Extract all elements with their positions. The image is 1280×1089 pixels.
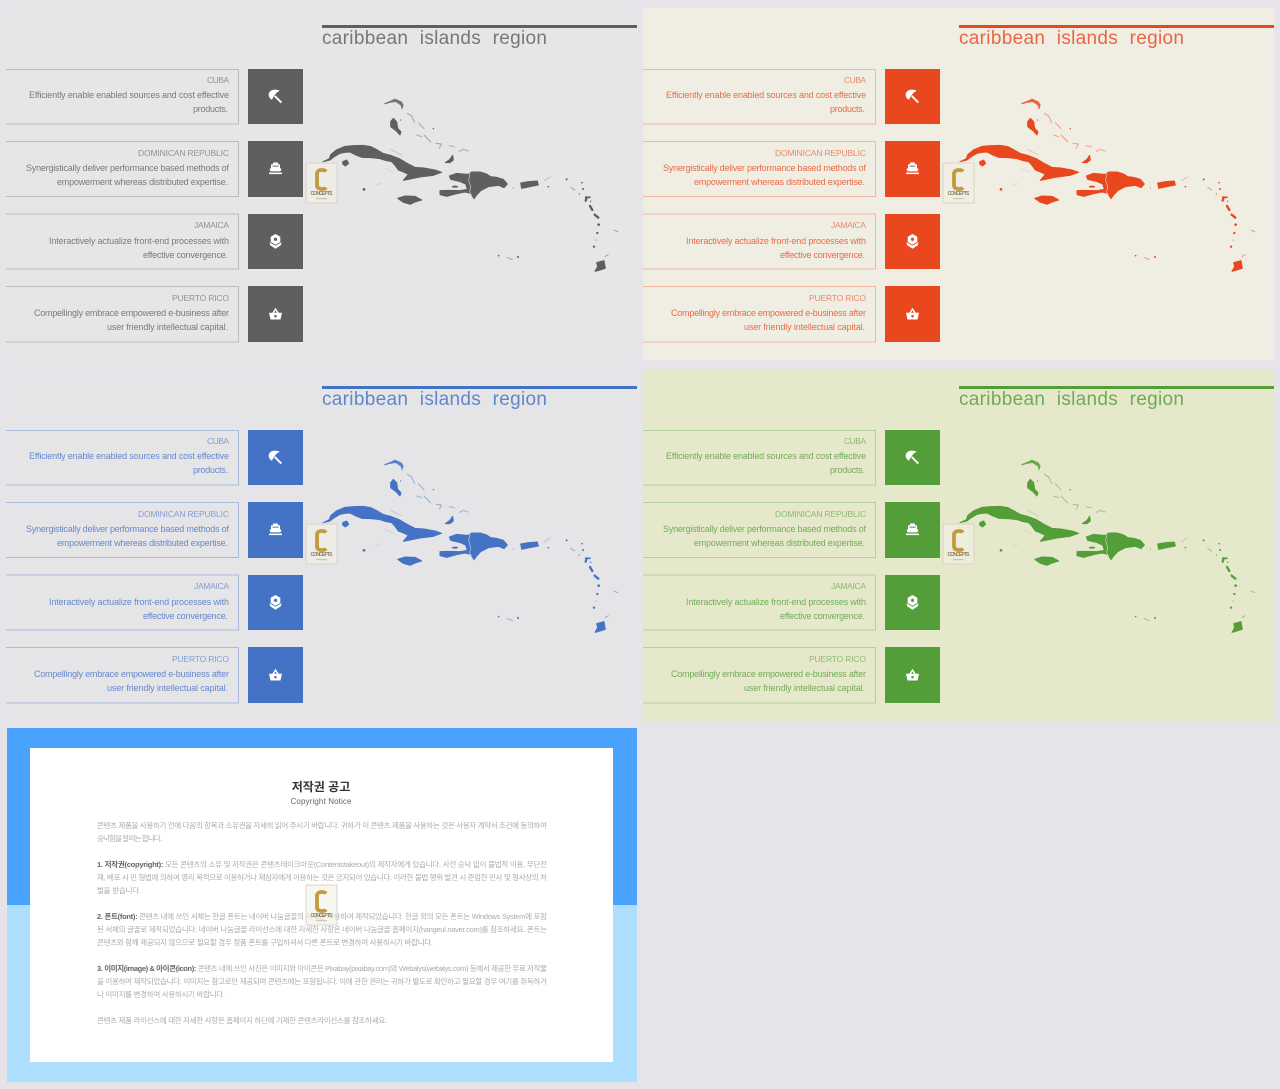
title: orange: caribbean islands region <box>959 28 1184 49</box>
row: Puerto Rico <box>6 647 303 703</box>
row: Puerto Rico: user friendly intellectual capital. <box>744 322 865 332</box>
panel: grey variant <box>6 8 637 360</box>
row: Jamaica <box>643 575 940 630</box>
row: Puerto Rico: PUERTO RICO <box>809 654 866 664</box>
heading: copyright <box>290 779 352 806</box>
text block: clause 3: 3. 이미지(image) & 아이콘(icon): 콘텐츠 내에 쓰인 사진은 이미지와 아이콘은 Pixabay(pixabay.com)와 Webalys(webalys.com) 등에서 제공한 무료 저작물 <box>97 963 547 973</box>
row: Cuba: Efficiently enable enabled sources and cost effective <box>666 451 866 461</box>
text block: clause 2: 2. 폰트(font): 콘텐츠 내에 쓰인 서체는 한글 폰트는 네이버 나눔글꼴의 서체를 사용하여 제작되었습니다. 한글 외의 모든 폰트는 Windows System에 포함 <box>97 911 547 921</box>
row: Jamaica: effective convergence. <box>143 611 228 621</box>
map: orange <box>960 99 1255 271</box>
row: Jamaica: Interactively actualize front-end processes with <box>686 236 866 246</box>
row: Puerto Rico: Compellingly embrace empowered e-business after <box>34 669 229 679</box>
title: grey <box>322 25 637 49</box>
row: Jamaica: JAMAICA <box>831 220 866 230</box>
text block: clause 3 <box>97 963 547 999</box>
row: Dominican Republic <box>643 141 940 197</box>
title: green <box>959 386 1274 410</box>
row: Dominican Republic: empowerment whereas distributed expertise. <box>57 177 228 187</box>
text block: clause 2 <box>97 911 547 947</box>
row: Jamaica: JAMAICA <box>194 220 229 230</box>
row: Dominican Republic <box>643 502 940 558</box>
row: Cuba: Efficiently enable enabled sources and cost effective <box>29 90 229 100</box>
map: blue <box>323 460 618 632</box>
text block: clause 1: 벌을 받습니다. <box>97 885 141 895</box>
text block: clause 3: 나 이미지를 변경하여 사용하시기 바랍니다. <box>97 989 225 999</box>
row: Cuba: Efficiently enable enabled sources and cost effective <box>666 90 866 100</box>
watermark <box>306 524 337 564</box>
row: Cuba: products. <box>193 465 228 475</box>
row: Jamaica: effective convergence. <box>143 250 228 260</box>
title: grey: caribbean islands region <box>322 28 547 49</box>
text block: clause 2: 콘텐츠와 함께 제공되지 않으므로 필요할 경우 정품 폰트를 구입하셔서 다른 폰트로 변경하여 사용하시기 바랍니다. <box>97 937 433 947</box>
row: Jamaica: Interactively actualize front-end processes with <box>49 236 229 246</box>
watermark <box>306 163 337 203</box>
watermark <box>943 163 974 203</box>
row: Cuba <box>6 69 303 124</box>
title: blue <box>322 386 637 410</box>
row: Puerto Rico: user friendly intellectual capital. <box>107 322 228 332</box>
row: Cuba: Efficiently enable enabled sources and cost effective <box>29 451 229 461</box>
heading: copyright: 저작권 공고 <box>292 779 350 794</box>
row: Cuba: products. <box>830 104 865 114</box>
panel: green variant <box>643 369 1274 721</box>
row: Dominican Republic <box>6 141 303 197</box>
row: Jamaica: Interactively actualize front-end processes with <box>49 597 229 607</box>
text block: licence note: 콘텐츠 제품 라이선스에 대한 자세한 사항은 홈페이지 하단에 기재한 콘텐츠라이선스를 참조하세요. <box>97 1015 387 1025</box>
text block: clause 1 <box>97 859 547 895</box>
row: Dominican Republic: empowerment whereas distributed expertise. <box>57 538 228 548</box>
watermark <box>306 885 337 925</box>
row: Dominican Republic: DOMINICAN REPUBLIC <box>138 148 229 158</box>
row: Puerto Rico <box>643 647 940 703</box>
row: Cuba: CUBA <box>207 75 229 85</box>
row: Cuba <box>6 430 303 485</box>
row: Dominican Republic: DOMINICAN REPUBLIC <box>138 509 229 519</box>
row: Puerto Rico <box>643 286 940 342</box>
row: Jamaica <box>6 575 303 630</box>
row: Puerto Rico: Compellingly embrace empowered e-business after <box>671 669 866 679</box>
row: Cuba: CUBA <box>844 75 866 85</box>
text block: intro: 콘텐츠 제품을 사용하기 전에 다음의 항목과 소유권을 자세히 읽어 주시기 바랍니다. 귀하가 이 콘텐츠 제품을 사용하는 것은 사용자 계약서 조건에 동의하여 <box>97 820 547 830</box>
row: Jamaica: JAMAICA <box>831 581 866 591</box>
row: Dominican Republic: empowerment whereas distributed expertise. <box>694 538 865 548</box>
text block: intro: 승낙함을 알리는 합니다. <box>97 833 162 843</box>
row: Puerto Rico: PUERTO RICO <box>172 293 229 303</box>
text block: clause 1: 재, 배포 시 민 형법에 의하여 영리 목적으로 이용하거나 제삼자에게 이용하는 것은 금지되어 있습니다. 이러한 불법 행위 발견 시 준엄한 민사 및 형사상의 처 <box>97 872 547 882</box>
row: Puerto Rico: user friendly intellectual capital. <box>107 683 228 693</box>
map: grey <box>323 99 618 271</box>
row: Puerto Rico <box>6 286 303 342</box>
row: Cuba: CUBA <box>844 436 866 446</box>
text block: clause 2: 된 서체의 글꼴로 제작되었습니다. 네이버 나눔글꼴 라이선스에 대한 자세한 사항은 네이버 나눔글꼴 홈페이지(hangeul.naver.com)를 참조하세요. 폰트는 <box>97 924 547 934</box>
row: Cuba <box>643 430 940 485</box>
row: Dominican Republic: DOMINICAN REPUBLIC <box>775 509 866 519</box>
text block: clause 3: 을 이용하여 제작되었습니다. 이미지는 참고로만 제공되며 콘텐츠에는 포함됩니다. 이에 관한 권리는 귀하가 별도로 확인하고 필요할 경우 여기를 취득하거 <box>97 976 547 986</box>
row: Jamaica: effective convergence. <box>780 611 865 621</box>
heading: copyright: Copyright Notice <box>290 797 352 806</box>
row: Cuba: products. <box>193 104 228 114</box>
row: Jamaica: JAMAICA <box>194 581 229 591</box>
watermark <box>943 524 974 564</box>
row: Cuba: CUBA <box>207 436 229 446</box>
row: Jamaica: effective convergence. <box>780 250 865 260</box>
row: Puerto Rico: PUERTO RICO <box>809 293 866 303</box>
row: Dominican Republic: Synergistically deliver performance based methods of <box>663 163 866 173</box>
row: Dominican Republic: Synergistically deliver performance based methods of <box>663 524 866 534</box>
row: Jamaica <box>643 214 940 269</box>
row: Dominican Republic <box>6 502 303 558</box>
row: Dominican Republic: Synergistically deliver performance based methods of <box>26 524 229 534</box>
title: blue: caribbean islands region <box>322 389 547 410</box>
text block: intro <box>97 820 547 843</box>
panel: copyright notice <box>7 728 637 1082</box>
row: Puerto Rico: Compellingly embrace empowered e-business after <box>34 308 229 318</box>
title: green: caribbean islands region <box>959 389 1184 410</box>
row: Dominican Republic: DOMINICAN REPUBLIC <box>775 148 866 158</box>
row: Jamaica <box>6 214 303 269</box>
map: green <box>960 460 1255 632</box>
panel: blue variant <box>6 369 637 721</box>
row: Cuba: products. <box>830 465 865 475</box>
row: Dominican Republic: empowerment whereas distributed expertise. <box>694 177 865 187</box>
row: Puerto Rico: user friendly intellectual capital. <box>744 683 865 693</box>
row: Jamaica: Interactively actualize front-end processes with <box>686 597 866 607</box>
title: orange <box>959 25 1274 49</box>
panel: orange variant <box>643 8 1274 360</box>
text block: clause 1: 1. 저작권(copyright): 모든 콘텐츠의 소유 및 저작권은 콘텐츠테이크아웃(Contentstakeout)의 제작자에게 있습니다. 사전 승낙 없이 불법적 이용, 무단전 <box>97 859 547 869</box>
row: Cuba <box>643 69 940 124</box>
row: Puerto Rico: Compellingly embrace empowered e-business after <box>671 308 866 318</box>
row: Puerto Rico: PUERTO RICO <box>172 654 229 664</box>
row: Dominican Republic: Synergistically deliver performance based methods of <box>26 163 229 173</box>
